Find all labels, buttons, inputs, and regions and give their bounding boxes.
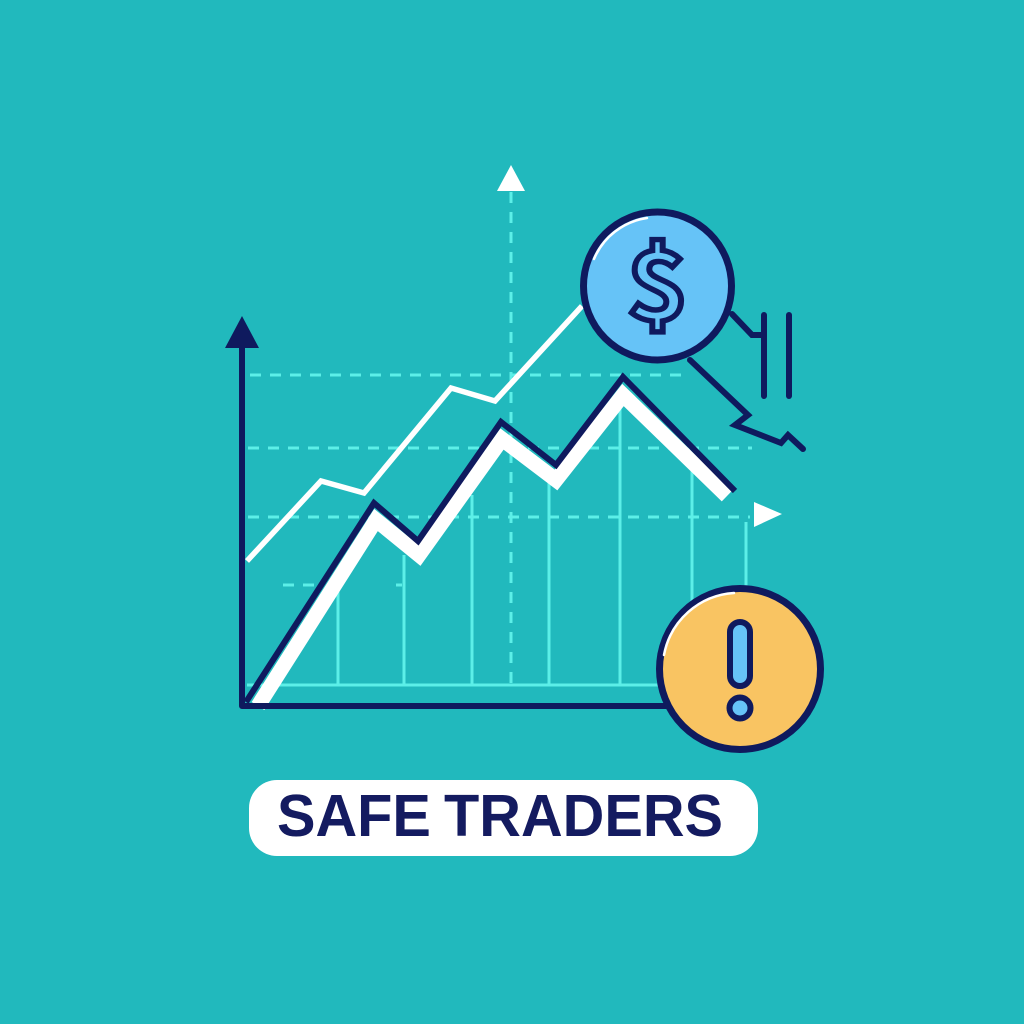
icon: dollar coin (584, 210, 732, 360)
exclamation mark (730, 622, 750, 718)
icon: warning badge (660, 588, 820, 750)
falling connector lines (690, 314, 803, 449)
arrow: vertical dashed axis (497, 165, 525, 191)
brand name: SAFE TRADERS (277, 783, 723, 849)
brand label (249, 780, 758, 856)
arrow: horizontal dashed axis (754, 502, 782, 527)
chart axes (225, 316, 670, 706)
main navy trend line (246, 377, 735, 702)
line chart (225, 165, 782, 706)
dollar sign: $ (627, 210, 688, 348)
thin white trend line (247, 306, 582, 561)
main white trend line (258, 395, 727, 706)
chart grid (247, 192, 752, 685)
